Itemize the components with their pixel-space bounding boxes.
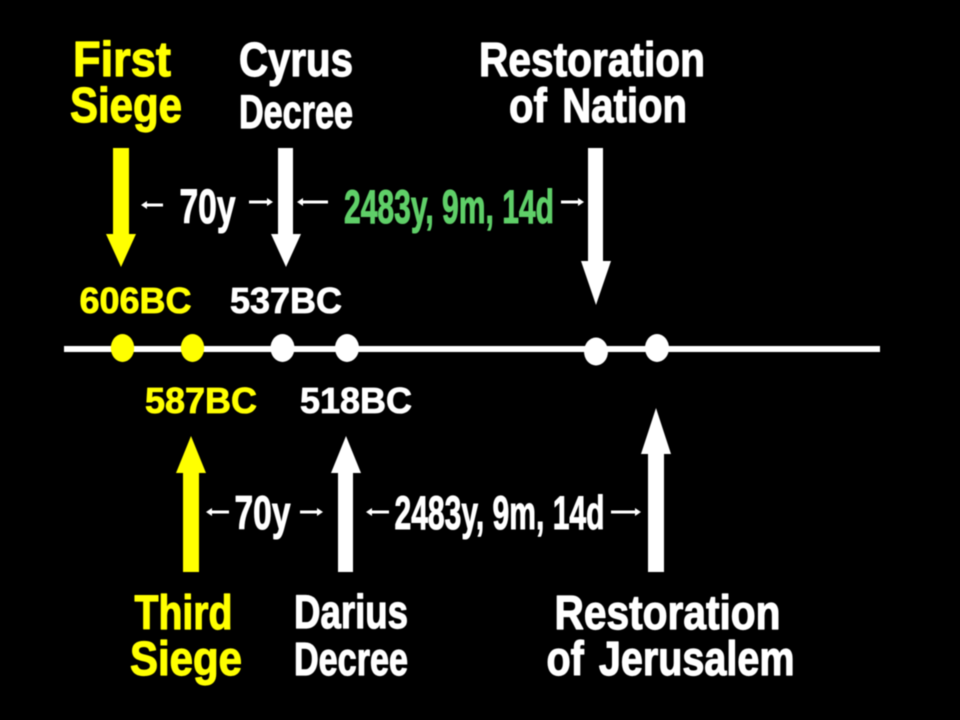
heading: Darius Decree: Decree — [294, 633, 408, 685]
date labels lower — [145, 380, 412, 421]
heading: Restoration of Jerusalem: of Jerusalem — [546, 633, 794, 686]
heading: Restoration of Nation: Restoration — [479, 34, 705, 87]
span label: 70y upper: 70y — [180, 181, 236, 234]
heading: Restoration of Nation — [479, 34, 705, 133]
heading: Restoration of Jerusalem: Restoration — [554, 587, 780, 640]
span label: 2483y lower: 2483y, 9m, 14d — [394, 486, 604, 539]
heading: Third Siege: Third — [134, 587, 232, 640]
heading: Darius Decree — [294, 585, 408, 685]
heading: Restoration of Nation: of Nation — [509, 80, 687, 133]
heading: First Siege: Siege — [70, 79, 182, 133]
span label: 2483y lower — [366, 486, 641, 539]
heading: Darius Decree: Darius — [294, 585, 408, 638]
date labels upper — [80, 280, 342, 321]
heading: First Siege: First — [73, 33, 171, 87]
timeline — [64, 334, 880, 366]
arrow: third siege up — [176, 436, 206, 572]
span label: 70y upper — [141, 181, 273, 234]
arrow: restoration of nation down — [581, 148, 611, 305]
date labels upper: 537BC — [230, 280, 342, 321]
span label: 2483y upper — [297, 180, 584, 233]
arrow: darius decree up — [331, 436, 361, 572]
arrow: first siege down — [106, 148, 136, 267]
heading: Cyrus Decree: Cyrus — [239, 34, 353, 87]
arrow: restoration of jerusalem up — [641, 408, 671, 572]
span label: 70y lower: 70y — [234, 486, 290, 539]
arrow: cyrus decree down — [271, 148, 301, 267]
heading: Cyrus Decree: Decree — [239, 85, 353, 138]
date labels lower: 518BC — [300, 380, 412, 421]
heading: Restoration of Jerusalem — [546, 587, 794, 686]
date labels upper: 606BC — [80, 280, 192, 321]
heading: First Siege — [70, 33, 182, 133]
span label: 2483y upper: 2483y, 9m, 14d — [344, 180, 554, 233]
heading: Third Siege: Siege — [130, 633, 242, 686]
timeline markers — [111, 334, 669, 366]
heading: Third Siege — [130, 587, 242, 686]
span label: 70y lower — [206, 486, 323, 539]
heading: Cyrus Decree — [239, 34, 353, 138]
date labels lower: 587BC — [145, 380, 257, 421]
